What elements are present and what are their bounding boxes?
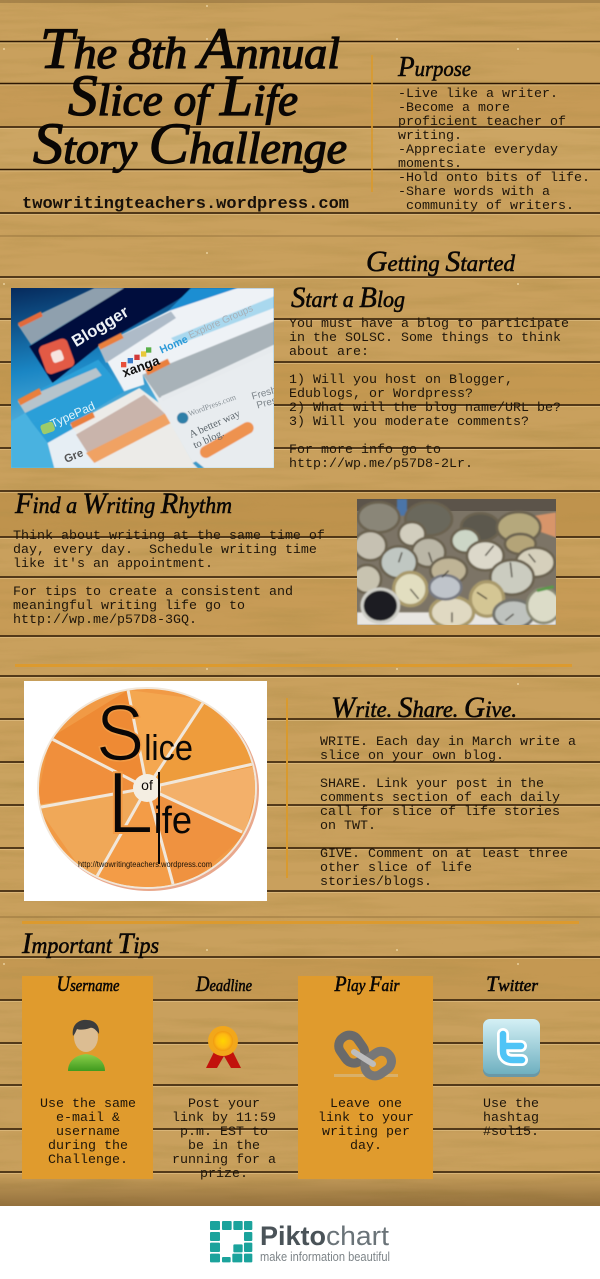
start a blog text: 3) Will you moderate comments? bbox=[289, 415, 529, 430]
tip: username: Use the same bbox=[40, 1097, 136, 1112]
tip: deadline: running for a bbox=[172, 1153, 276, 1168]
start a blog text: 2) What will the blog name/URL be? bbox=[289, 401, 561, 416]
tip: deadline: Deadline bbox=[195, 971, 252, 996]
image: slice of life logo bbox=[24, 680, 270, 901]
tip: play fair: Leave one bbox=[330, 1097, 402, 1112]
tip: deadline bbox=[172, 971, 276, 1182]
writing rhythm text: day, every day. Schedule writing time bbox=[13, 543, 317, 558]
vertical divider: write share give bbox=[286, 698, 288, 878]
purpose list: -Appreciate everyday bbox=[398, 143, 558, 158]
image: blog platforms collage: Blogger bbox=[68, 302, 132, 351]
purpose list: -Live like a writer. bbox=[398, 87, 558, 102]
piktochart logo: chart bbox=[326, 1221, 390, 1251]
title: Story Challenge bbox=[33, 111, 347, 176]
piktochart logo bbox=[210, 1221, 390, 1264]
title bbox=[33, 16, 347, 176]
tip: username: Username bbox=[56, 971, 120, 996]
panel: find a writing rhythm bbox=[13, 487, 325, 628]
start a blog text bbox=[289, 317, 569, 472]
heading: find a writing rhythm: Find a Writing Rhythm bbox=[14, 487, 232, 520]
tip: twitter bbox=[483, 971, 540, 1140]
divider: upper bbox=[15, 664, 572, 667]
tip: play fair: day. bbox=[350, 1139, 382, 1154]
start a blog text: You must have a blog to participate bbox=[289, 317, 569, 332]
tip: twitter: Twitter bbox=[486, 971, 538, 996]
tip: deadline: p.m. EST to bbox=[180, 1125, 268, 1140]
purpose list: -Become a more bbox=[398, 101, 510, 116]
panel: write share give bbox=[320, 691, 576, 890]
purpose list: -Share words with a bbox=[398, 185, 550, 200]
icon: award medal bbox=[206, 1026, 241, 1068]
image: blog platforms collage: Home bbox=[158, 333, 190, 356]
write share give text bbox=[320, 735, 576, 890]
tip: deadline: link by 11:59 bbox=[172, 1111, 276, 1126]
start a blog text: 1) Will you host on Blogger, bbox=[289, 373, 513, 388]
writing rhythm text bbox=[13, 529, 325, 628]
purpose list: proficient teacher of bbox=[398, 115, 566, 130]
tip: play fair bbox=[298, 971, 433, 1179]
image: blog platforms collage: WordPress.com bbox=[187, 392, 238, 418]
image: alarm clocks bbox=[353, 499, 560, 628]
start a blog text: http://wp.me/p57D8-2Lr. bbox=[289, 457, 473, 472]
image: blog platforms collage: Gre bbox=[63, 447, 85, 466]
purpose list: moments. bbox=[398, 157, 462, 172]
bottom white footer bbox=[0, 1206, 600, 1279]
heading: write share give: Write. Share. Give. bbox=[331, 691, 517, 724]
image: blog platforms collage: TypePad bbox=[48, 399, 97, 431]
image: blog platforms collage: xanga bbox=[120, 353, 162, 380]
tip: play fair: writing per bbox=[322, 1125, 410, 1140]
purpose list: writing. bbox=[398, 129, 462, 144]
heading: important tips: Important Tips bbox=[21, 927, 159, 960]
image: blog platforms collage: A better way bbox=[188, 408, 243, 441]
image: blog platforms collage: Fresh bbox=[250, 385, 278, 403]
tip: twitter: Use the bbox=[483, 1097, 539, 1112]
divider: lower bbox=[22, 921, 579, 924]
image: slice of life logo: Life bbox=[107, 753, 192, 852]
tip: username: Challenge. bbox=[48, 1153, 128, 1168]
image: slice of life logo: Slice bbox=[96, 688, 193, 777]
write share give text: SHARE. Link your post in the bbox=[320, 777, 544, 792]
heading: start a blog: Start a Blog bbox=[291, 281, 405, 314]
image: blog platforms collage: Explore Groups bbox=[187, 303, 255, 341]
start a blog text: about are: bbox=[289, 345, 369, 360]
piktochart logo: make information beautiful bbox=[260, 1249, 390, 1264]
heading: getting started: Getting Started bbox=[366, 245, 515, 278]
start a blog text: Edublogs, or Wordpress? bbox=[289, 387, 473, 402]
writing rhythm text: Think about writing at the same time of bbox=[13, 529, 325, 544]
title: Slice of Life bbox=[68, 63, 298, 128]
writing rhythm text: http://wp.me/p57D8-3GQ. bbox=[13, 613, 197, 628]
purpose list bbox=[398, 87, 590, 214]
write share give text: comments section of each daily bbox=[320, 791, 560, 806]
image: blog platforms collage: Press bbox=[255, 394, 283, 412]
write share give text: slice on your own blog. bbox=[320, 749, 504, 764]
write share give text: WRITE. Each day in March write a bbox=[320, 735, 576, 750]
writing rhythm text: meaningful writing life go to bbox=[13, 599, 245, 614]
icon: piktochart mark bbox=[210, 1221, 252, 1262]
icon: twitter bird bbox=[483, 1019, 540, 1077]
panel: start a blog bbox=[289, 281, 569, 472]
title: The 8th Annual bbox=[40, 16, 340, 81]
image: slice of life logo: of bbox=[141, 777, 153, 793]
tip: twitter: #sol15. bbox=[483, 1125, 539, 1140]
heading: purpose: Purpose bbox=[397, 51, 471, 83]
tip: username bbox=[22, 971, 153, 1179]
write share give text: GIVE. Comment on at least three bbox=[320, 847, 568, 862]
website address: twowritingteachers.wordpress.com bbox=[22, 195, 349, 214]
panel: purpose bbox=[397, 51, 590, 214]
tip: twitter: hashtag bbox=[483, 1111, 539, 1126]
write share give text: on TWT. bbox=[320, 819, 376, 834]
writing rhythm text: For tips to create a consistent and bbox=[13, 585, 293, 600]
write share give text: call for slice of life stories bbox=[320, 805, 560, 820]
writing rhythm text: like it's an appointment. bbox=[13, 557, 213, 572]
write share give text: other slice of life bbox=[320, 861, 472, 876]
icon: user bbox=[68, 1020, 105, 1071]
icon: chain link bbox=[334, 1031, 398, 1080]
start a blog text: in the SOLSC. Some things to think bbox=[289, 331, 561, 346]
start a blog text: For more info go to bbox=[289, 443, 441, 458]
image: slice of life logo: http://twowritingteachers.wordpress.com bbox=[78, 860, 212, 869]
tip: play fair: link to your bbox=[318, 1111, 414, 1126]
write share give text: stories/blogs. bbox=[320, 875, 432, 890]
tip: username: during the bbox=[48, 1139, 128, 1154]
vertical divider: purpose bbox=[371, 55, 373, 192]
tip: play fair: Play Fair bbox=[334, 971, 400, 996]
image: blog platforms collage bbox=[11, 288, 283, 468]
tip: deadline: be in the bbox=[188, 1139, 260, 1154]
purpose list: community of writers. bbox=[406, 199, 574, 214]
tip: username: username bbox=[56, 1125, 120, 1140]
tip: deadline: prize. bbox=[200, 1167, 248, 1182]
image: blog platforms collage: to blog. bbox=[192, 428, 226, 451]
purpose list: -Hold onto bits of life. bbox=[398, 171, 590, 186]
tip: username: e-mail & bbox=[56, 1111, 120, 1126]
tip: deadline: Post your bbox=[188, 1097, 260, 1112]
piktochart logo: Pikto bbox=[260, 1221, 326, 1251]
